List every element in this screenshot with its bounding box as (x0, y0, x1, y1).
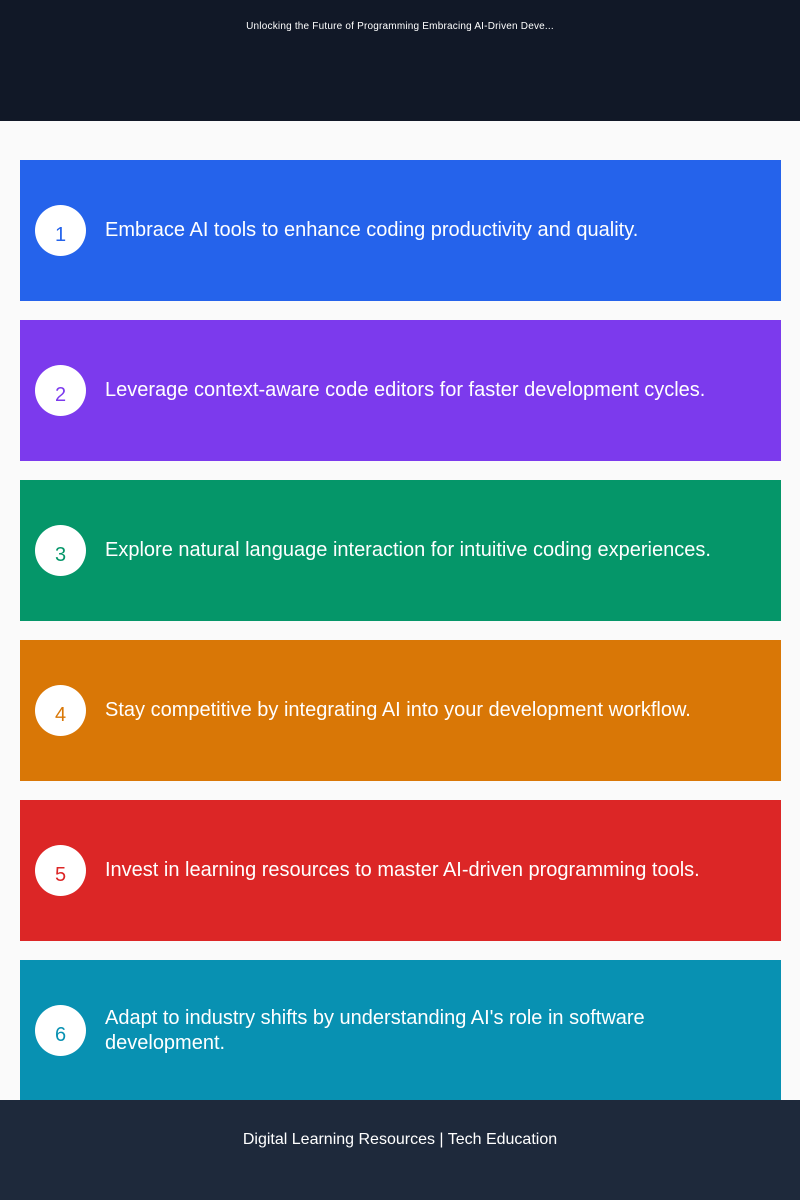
panel: item 5 (20, 800, 781, 941)
text 5: Invest in learning resources to master AI-driven programming tools. (105, 859, 700, 881)
icon: number 1 (35, 205, 86, 256)
panel: item 3 (20, 480, 781, 621)
icon: number 4: 4 (55, 704, 66, 726)
panel: item 4 (20, 640, 781, 781)
text 2: Leverage context-aware code editors for faster development cycles. (105, 379, 705, 401)
text 1: Embrace AI tools to enhance coding productivity and quality. (105, 219, 638, 241)
icon: number 4 (35, 685, 86, 736)
text 4: Stay competitive by integrating AI into your development workflow. (105, 699, 691, 721)
header (0, 0, 800, 121)
footer text: Digital Learning Resources | Tech Education (243, 1131, 557, 1148)
icon: number 3: 3 (55, 544, 66, 566)
icon: number 6: 6 (55, 1024, 66, 1046)
panel: item 6 (20, 960, 781, 1101)
icon: number 3 (35, 525, 86, 576)
icon: number 6 (35, 1005, 86, 1056)
icon: number 2: 2 (55, 384, 66, 406)
text 3: Explore natural language interaction for intuitive coding experiences. (105, 539, 711, 561)
text 6: Adapt to industry shifts by understanding AI's role in software development. (105, 1006, 645, 1054)
panel: item 2 (20, 320, 781, 461)
icon: number 2 (35, 365, 86, 416)
footer (0, 1100, 800, 1200)
title: Unlocking the Future of Programming Embracing AI-Driven Deve... (246, 21, 554, 32)
icon: number 5 (35, 845, 86, 896)
icon: number 5: 5 (55, 864, 66, 886)
panel: item 1 (20, 160, 781, 301)
icon: number 1: 1 (55, 224, 66, 246)
